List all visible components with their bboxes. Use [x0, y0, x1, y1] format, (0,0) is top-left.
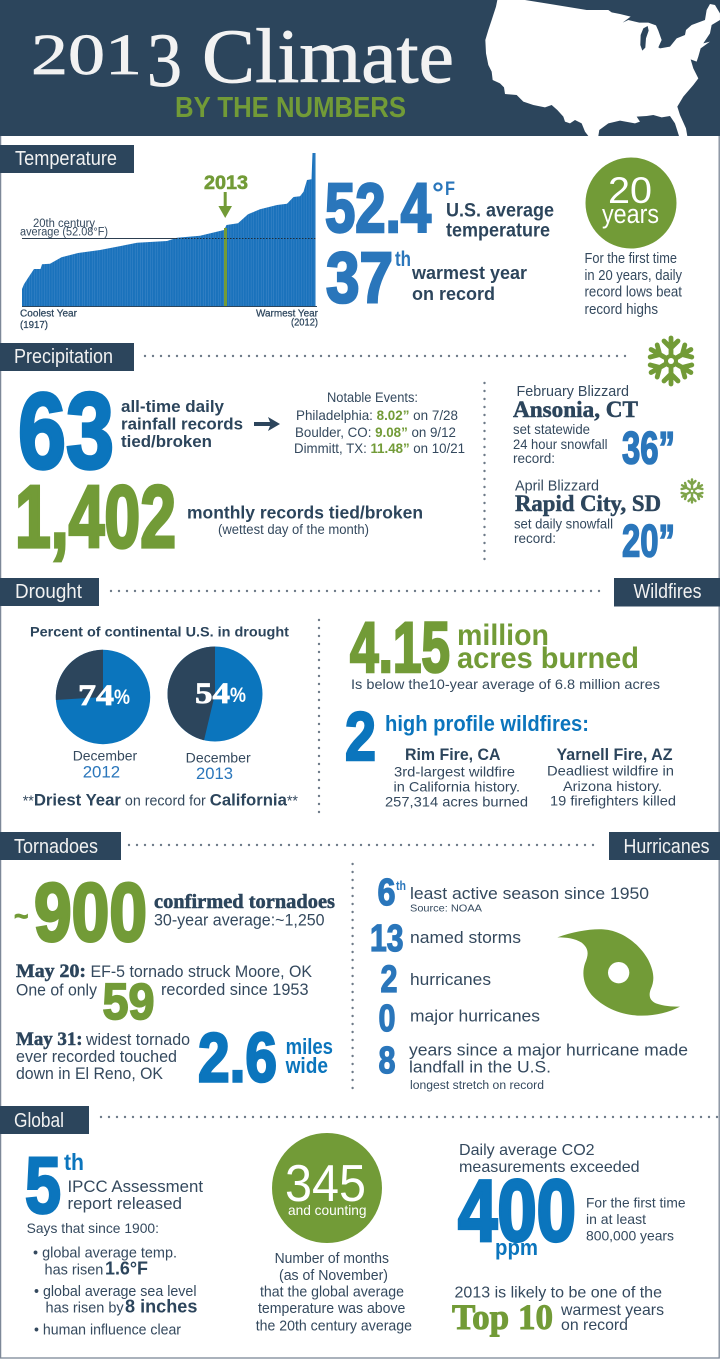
stat: 6th least active season: th [396, 878, 406, 893]
icon: hurricane symbol [557, 929, 680, 1016]
stat: 400 ppm CO2: ppm [495, 1235, 538, 1260]
text block: Yarnell Fire [547, 745, 676, 809]
stat: 400 ppm CO2: 400 [458, 1162, 576, 1260]
text block: Yarnell Fire: Yarnell Fire, AZ [556, 745, 672, 764]
section header: Drought: Drought [15, 581, 82, 603]
section header: Global: Global [14, 1110, 64, 1132]
bar chart: annual temperatures ranked [20, 153, 318, 331]
callout: driest year California: **Driest Year on record for California** [23, 791, 298, 810]
panel: April blizzard: Rapid City, SD [515, 491, 661, 516]
section header: Temperature: Temperature [15, 148, 117, 170]
panel: IPCC report [25, 1140, 203, 1339]
panel: April blizzard: 20” [622, 516, 675, 566]
panel: drought pie charts [23, 624, 298, 810]
callout: 20 years circle: 20 [608, 170, 652, 211]
text block: Yarnell Fire: Deadliest wildfire in [547, 763, 674, 779]
section header: Temperature [0, 145, 134, 173]
chart label: 2013: 2013 [204, 173, 248, 194]
stat: 4.15 million acres burned [350, 609, 660, 692]
stat: 1,402 monthly records [15, 467, 423, 566]
panel: hurricane statistics [370, 872, 688, 1092]
stat: top 10 warmest years: on record [561, 1317, 628, 1334]
stat: 8 years since major landfall: landfall in the U.S. [409, 1058, 551, 1077]
axis label: warmest year: Warmest Year [256, 308, 318, 320]
pie chart: December 2013: 54 [195, 677, 230, 710]
stat: top 10 warmest years: Top 10 [452, 1297, 553, 1337]
stat: 2 hurricanes: 2 [380, 959, 398, 1001]
panel: April blizzard: set daily snowfall [514, 516, 613, 532]
stat: 400 ppm CO2: measurements exceeded [459, 1159, 640, 1176]
stat: 400 ppm CO2: 800,000 years [586, 1228, 674, 1244]
stat: 0 major hurricanes: major hurricanes [410, 1007, 540, 1026]
callout: 345 and counting circle: 345 [285, 1155, 366, 1213]
pie chart: December 2012: % [114, 686, 130, 709]
panel: February blizzard [513, 384, 675, 474]
text block: May 20 Moore tornado: May 20: [16, 962, 86, 982]
stat: 63 rainfall records: 63 [18, 370, 114, 491]
stat: about 900 confirmed tornadoes: ~ [14, 900, 28, 933]
text block: May 31 El Reno tornado: wide [285, 1053, 328, 1078]
stat: 0 major hurricanes [378, 998, 540, 1040]
text block: May 20 Moore tornado: 59 [102, 973, 154, 1030]
stat: 63 rainfall records [18, 370, 243, 491]
stat: 52.4 F average temperature [325, 169, 554, 247]
stat: 6th least active season: 6 [378, 872, 396, 914]
stat: 2 high profile wildfires [345, 698, 676, 810]
stat: about 900 confirmed tornadoes: 900 [34, 866, 147, 958]
stat: 8 years since major landfall: years since a major hurricane made [409, 1041, 688, 1060]
text block: Rim Fire: 257,314 acres burned [385, 794, 528, 810]
stat: 63 rainfall records: tied/broken [121, 433, 212, 451]
stat: 8 years since major landfall: 8 [378, 1040, 396, 1082]
text block: May 20 Moore tornado [16, 962, 312, 1030]
bullet: human influence: • human influence clear [34, 1323, 181, 1339]
stat: 13 named storms: named storms [410, 928, 521, 947]
pie chart: December 2012 [56, 650, 150, 744]
text block: May 31 El Reno tornado [16, 1018, 333, 1096]
bullet: global sea level: 8 inches [125, 1297, 197, 1317]
text block: notable events [294, 390, 465, 456]
text block: May 31 El Reno tornado: 2.6 [198, 1018, 277, 1096]
stat: 6th least active season: Source: NOAA [410, 904, 482, 915]
stat: 37th warmest year: th [395, 248, 411, 271]
text block: months above average: Number of months [275, 1251, 389, 1267]
bullet: global average temperature: 1.6°F [105, 1259, 148, 1279]
stat: about 900 confirmed tornadoes: confirmed tornadoes [154, 891, 335, 913]
stat: 4.15 million acres burned: 4.15 [350, 609, 450, 688]
text: record lows beat record highs: record highs [584, 302, 658, 318]
stat: 63 rainfall records: rainfall records [121, 416, 243, 434]
stat: 4.15 million acres burned: million [457, 619, 549, 652]
label: December 2012: December [73, 748, 138, 764]
text block: notable events: Boulder, CO: 9.08” on 9/12 [295, 424, 456, 440]
arrow: marks 2013 bar [218, 192, 232, 218]
panel: April blizzard: record: [514, 530, 556, 546]
text block: notable events: Philadelphia: 8.02” on 7/28 [296, 407, 458, 423]
panel: February blizzard: Ansonia, CT [513, 397, 638, 422]
section header: Hurricanes [609, 832, 720, 860]
panel: IPCC report: Says that since 1900: [27, 1220, 159, 1236]
panel: IPCC report: report released [68, 1194, 182, 1213]
text block: May 31 El Reno tornado: miles [286, 1034, 333, 1059]
section header: Tornadoes [0, 832, 121, 860]
stat: 52.4 F average temperature: ° [432, 177, 444, 210]
stat: 400 ppm CO2: For the first time [586, 1195, 686, 1211]
panel: IPCC report: th [64, 1149, 84, 1175]
callout: 345 and counting circle: and counting [288, 1202, 366, 1218]
section header: Precipitation: Precipitation [14, 346, 113, 368]
stat: 37th warmest year: warmest year [411, 262, 527, 283]
stat: 2 hurricanes [380, 959, 491, 1001]
text block: months above average: that the global average [260, 1285, 404, 1301]
stat: 4.15 million acres burned: Is below the10-year average of 6.8 million acres [351, 676, 660, 692]
text block: May 20 Moore tornado: recorded since 1953 [161, 981, 308, 999]
panel: February blizzard: February Blizzard [516, 384, 629, 400]
text: record lows beat record highs: in 20 years, daily [584, 268, 683, 284]
stat: top 10 warmest years: 2013 is likely to be one of the [454, 1285, 662, 1302]
stat: 63 rainfall records: all-time daily [121, 398, 225, 416]
text block: May 31 El Reno tornado: ever recorded touched [16, 1048, 177, 1066]
chart label: 20th century average: average (52.08°F) [20, 226, 108, 238]
stat: 37th warmest year: 37 [326, 239, 393, 318]
section header: Tornadoes: Tornadoes [14, 836, 98, 858]
title: Climate [202, 13, 454, 99]
text block: months above average: the 20th century average [256, 1319, 412, 1335]
stat: about 900 confirmed tornadoes [14, 866, 335, 958]
stat: 1,402 monthly records: 1,402 [15, 467, 176, 566]
callout: 20 years circle: years [602, 199, 659, 229]
stat: 1,402 monthly records: monthly records tied/broken [187, 503, 423, 523]
bullet: global average temperature: has risen [44, 1263, 107, 1279]
panel: February blizzard: record: [513, 450, 555, 466]
text: record lows beat record highs: record lows beat [584, 285, 682, 301]
label: December 2012 [73, 748, 138, 782]
heading: percent in drought: Percent of continental U.S. in drought [30, 624, 289, 640]
callout: 20 years circle [586, 158, 676, 248]
text: record lows beat record highs: For the first time [584, 251, 677, 267]
stat: 6th least active season: least active season since 1950 [410, 884, 649, 903]
stat: 37th warmest year: on record [412, 283, 495, 304]
axis label: coolest year: Coolest Year [20, 308, 77, 320]
section header: Global [0, 1106, 89, 1134]
section header: Wildfires: Wildfires [634, 581, 702, 603]
text block: Rim Fire [385, 745, 528, 810]
bullet: global sea level: has risen by [46, 1301, 128, 1317]
icon: map of the United States [485, 0, 720, 136]
label: December 2013: December [186, 750, 251, 766]
pie chart: December 2012: 74 [78, 679, 114, 712]
text block: Yarnell Fire: 19 firefighters killed [550, 793, 676, 809]
text block: notable events: Dimmitt, TX: 11.48” on 10/21 [294, 440, 465, 456]
stat: about 900 confirmed tornadoes: 30-year average:~1,250 [154, 912, 325, 930]
label: December 2013: 2013 [196, 764, 233, 783]
stat: 2 hurricanes: hurricanes [410, 970, 491, 989]
stat: 52.4 F average temperature: F [445, 179, 455, 200]
pie chart: December 2013: % [230, 684, 246, 707]
subtitle: BY THE NUMBERS [175, 92, 406, 124]
stat: 13 named storms: 13 [370, 918, 404, 960]
title: 3 [147, 19, 182, 103]
panel: April blizzard: April Blizzard [515, 479, 599, 495]
stat: 1,402 monthly records: (wettest day of the month) [218, 522, 369, 537]
label: December 2012: 2012 [83, 763, 120, 782]
stat: 6th least active season [378, 872, 649, 915]
panel: February blizzard: 36” [622, 422, 675, 474]
stat: 8 years since major landfall: longest stretch on record [410, 1080, 544, 1092]
axis label: warmest year: (2012) [291, 316, 318, 328]
text block: Rim Fire: Rim Fire, CA [405, 745, 500, 764]
axis label: coolest year: (1917) [20, 319, 48, 331]
stat: 400 ppm CO2: in at least [586, 1211, 646, 1227]
panel: February blizzard: 24 hour snowfall [513, 436, 608, 452]
stat: top 10 warmest years [452, 1285, 664, 1337]
stat: 4.15 million acres burned: acres burned [457, 642, 639, 675]
panel: February blizzard: set statewide [513, 421, 590, 437]
stat: 13 named storms [370, 918, 521, 960]
section header: Precipitation [0, 343, 134, 371]
icon: small snowflake [680, 480, 704, 502]
bullet: global average temperature: • global average temp. [33, 1246, 177, 1262]
label: December 2013 [186, 750, 251, 783]
chart label: 20th century average: 20th century [33, 218, 95, 230]
pie chart: December 2013 [168, 646, 262, 742]
text block: May 31 El Reno tornado: down in El Reno, OK [16, 1065, 163, 1083]
text block: Yarnell Fire: Arizona history. [563, 778, 662, 794]
stat: 400 ppm CO2: Daily average CO2 [459, 1142, 595, 1159]
stat: 52.4 F average temperature: 52.4 [325, 169, 431, 247]
text block: months above average: (as of November) [279, 1268, 388, 1284]
stat: top 10 warmest years: warmest years [560, 1302, 664, 1319]
header banner [0, 0, 720, 136]
stat: 2 high profile wildfires: 2 [345, 698, 376, 775]
section header: Drought [0, 578, 99, 606]
section header: Wildfires [614, 578, 720, 606]
text block: May 31 El Reno tornado: widest tornado [85, 1031, 190, 1049]
text block: Rim Fire: in California history. [394, 779, 520, 795]
section header: Hurricanes: Hurricanes [624, 836, 710, 858]
icon: large snowflake [648, 338, 694, 384]
text block: Rim Fire: 3rd-largest wildfire [394, 764, 515, 780]
stat: 52.4 F average temperature: temperature [446, 220, 550, 242]
panel: IPCC report: 5 [25, 1140, 61, 1230]
stat: 2 high profile wildfires: high profile wildfires: [385, 711, 589, 736]
stat: 37th warmest year [326, 239, 527, 318]
panel: April blizzard [514, 479, 675, 566]
stat: 0 major hurricanes: 0 [378, 998, 396, 1040]
panel: IPCC report: IPCC Assessment [68, 1177, 203, 1196]
text block: May 31 El Reno tornado: May 31: [16, 1030, 83, 1050]
bullet: global sea level: • global average sea level [34, 1284, 196, 1300]
stat: 52.4 F average temperature: U.S. average [446, 200, 554, 222]
text block: notable events: Notable Events: [327, 390, 418, 405]
title: 201 [31, 22, 142, 87]
text block: months above average: temperature was above [258, 1301, 405, 1317]
callout: 345 and counting circle [272, 1133, 382, 1243]
stat: 400 ppm CO2 [458, 1142, 686, 1260]
arrow: to notable events [254, 417, 280, 431]
text block: May 20 Moore tornado: EF-5 tornado struck Moore, OK [90, 963, 312, 981]
text block: May 20 Moore tornado: One of only [16, 982, 98, 1000]
stat: 8 years since major landfall [378, 1040, 688, 1092]
